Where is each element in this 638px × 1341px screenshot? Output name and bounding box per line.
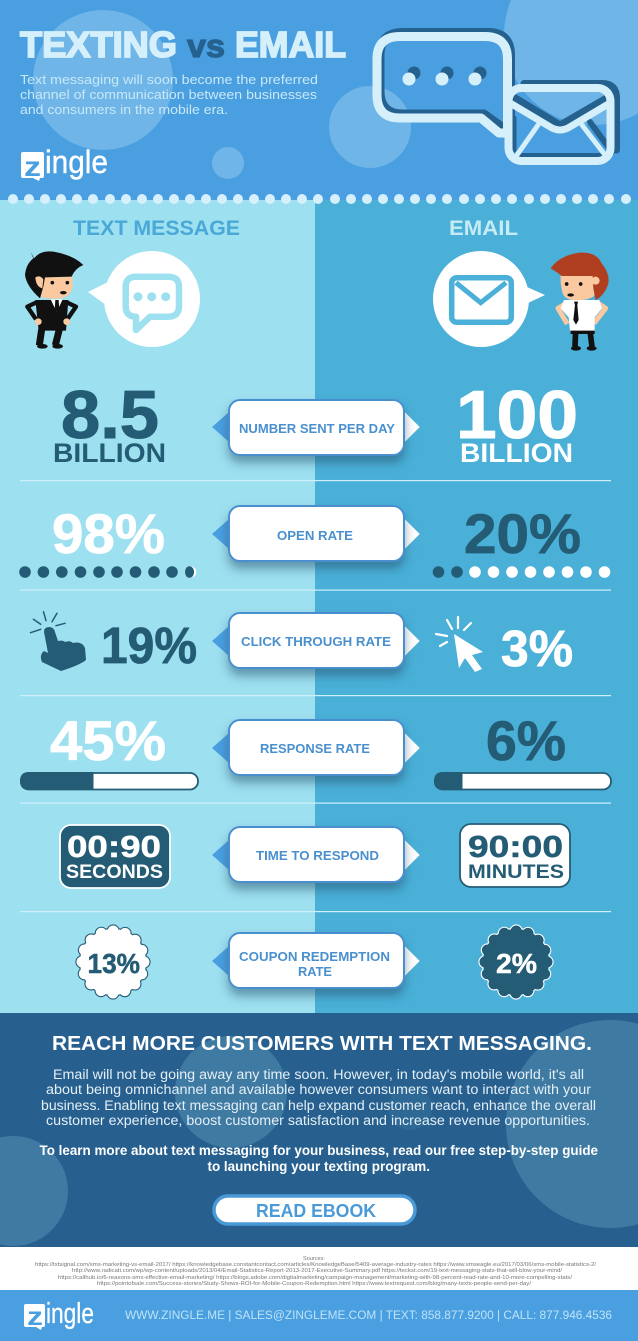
stat: 45%: 45% [50,709,166,772]
panel: sources: https://callhub.io/6-reasons-sms-effective-email-marketing/ https://blogs.adobe.com/digitalmarketing/campaign-management/marketing-with-98-percent-read-rate-and-10-more-compelling-stats/ [58,1275,573,1281]
stat: 20%: 20% [464,502,581,565]
panel: sources: https://pointofsale.com/Success-stories/Study-Shows-ROI-for-Mobile-Coupon-Redemption.html https://www.textrequest.com/blog/many-texts-people-send-per-day/ [97,1281,532,1287]
row: response rate [20,709,611,790]
speech bubble: text message [88,251,200,347]
stat: 8.5 billion: BILLION [53,438,166,468]
badge: 2%: 2% [496,948,537,979]
button: read ebook [214,1196,415,1224]
title: TEXTING [20,24,177,65]
badge: 13%: 13% [88,948,140,979]
timer: 90:00 minutes: MINUTES [468,862,564,883]
logo: zingle: ingle [45,144,108,180]
stat: 100 billion: 100 [456,377,578,453]
character: man with red hair [551,253,609,351]
stat: 98%: 98% [52,502,165,565]
panel: call to action [0,1013,638,1247]
dots: 98 percent [19,566,196,578]
intro text: and consumers in the mobile era. [20,102,228,117]
logo: zingle [24,1298,94,1331]
dots: 20 percent [433,566,610,578]
panel: header [0,0,638,200]
label: coupon redemption rate [212,933,419,988]
progress bar: 6 percent [434,772,611,790]
icon: chat [126,277,179,330]
timer: 00:90 seconds: SECONDS [66,862,163,883]
label: open rate: OPEN RATE [277,528,353,543]
stat: 19%: 19% [101,617,197,674]
button: read ebook: READ EBOOK [256,1201,376,1221]
row dividers [20,480,611,912]
label: time to respond: TIME TO RESPOND [256,848,379,863]
stat: 6%: 6% [486,709,566,772]
intro text: Text messaging will soon become the preferred [20,72,318,87]
title [20,24,346,65]
label: number sent per day [212,400,419,455]
icon: envelope [452,278,511,322]
stat: 3%: 3% [501,620,573,677]
timer: 00:90 seconds [60,825,170,888]
row: number sent per day [53,377,578,468]
intro text [20,72,318,117]
row: click through rate [30,612,573,677]
character: businessman in black suit [25,251,83,349]
heading: reach more customers: REACH MORE CUSTOMERS WITH TEXT MESSAGING. [52,1033,592,1055]
label: click through rate: CLICK THROUGH RATE [241,634,391,649]
timer: 90:00 minutes: 90:00 [468,829,563,864]
label: time to respond [212,827,419,882]
timer: 00:90 seconds: 00:90 [67,829,161,864]
call to action text [40,1143,598,1174]
panel: sources: https://txtsignal.com/sms-marketing-vs-email-2017/ https://knowledgebase.constantcontact.com/articles/KnowledgeBase/5409-average-industry-rates https://www.smseagle.eu/2017/03/06/sms-mobile-statistics-2/ [35,1262,597,1268]
panel: text message column [0,200,315,1013]
stat: 8.5 billion [53,377,166,468]
intro text: channel of communication between businesses [20,87,318,102]
progress bar: 45 percent [20,772,198,790]
label: response rate [212,720,419,775]
panel: sources [0,1247,638,1290]
icon: cursor [436,617,483,672]
icon: chat bubble [377,32,510,133]
label: number sent per day: NUMBER SENT PER DAY [239,421,395,436]
label: coupon redemption rate: COUPON REDEMPTION [239,949,390,964]
dotted divider [8,194,631,204]
contact details: WWW.ZINGLE.ME | SALES@ZINGLEME.COM | TEXT: 858.877.9200 | CALL: 877.946.4536 [125,1310,612,1322]
panel: sources: Sources: [303,1256,325,1262]
heading: email: EMAIL [449,217,518,240]
logo: zingle: z [27,1303,43,1331]
heading: text message: TEXT MESSAGE [73,217,240,240]
icon: envelope [508,84,616,161]
body text: Email will not be going away any time soon. However, in today's mobile world, it's all [53,1067,584,1082]
label: click through rate [212,613,419,668]
panel: sources: http://www.radicati.com/wp/wp-content/uploads/2013/04/Email-Statistics-Report-2013-2017-Executive-Summary.pdf https://teckst.com/19-text-messaging-stats-that-will-blow-your-mind/ [72,1268,563,1274]
row: time to respond [60,824,570,888]
stat: 8.5 billion: 8.5 [61,377,159,453]
title: vs [187,28,225,64]
speech bubble: email [433,251,545,347]
title: EMAIL [235,24,346,65]
badge: 13% [79,928,147,996]
body text: customer experience, boost customer satisfaction and increase revenue opportunities. [46,1113,590,1128]
logo: zingle: ingle [46,1298,94,1330]
label: open rate [212,506,419,561]
body text: business. Enabling text messaging can help expand customer reach, enhance the overall [41,1098,596,1113]
call to action text: to launching your texting program. [208,1159,430,1174]
logo: zingle [21,144,108,182]
badge: 2% [482,928,550,996]
panel: email column [315,200,638,1013]
stat: 100 billion: BILLION [460,438,573,468]
icon: pointing hand [30,612,86,671]
label: coupon redemption rate: RATE [298,964,332,979]
panel: footer [0,1290,638,1341]
timer: 90:00 minutes [460,824,570,887]
body text: about being omnichannel and available however consumers want to interact with your [46,1082,592,1097]
row: open rate [19,502,610,578]
call to action text: To learn more about text messaging for your business, read our free step-by-step guide [40,1143,598,1158]
body text [41,1067,596,1128]
label: response rate: RESPONSE RATE [260,741,370,756]
row: coupon redemption rate [79,928,550,996]
logo: zingle: z [24,151,41,182]
